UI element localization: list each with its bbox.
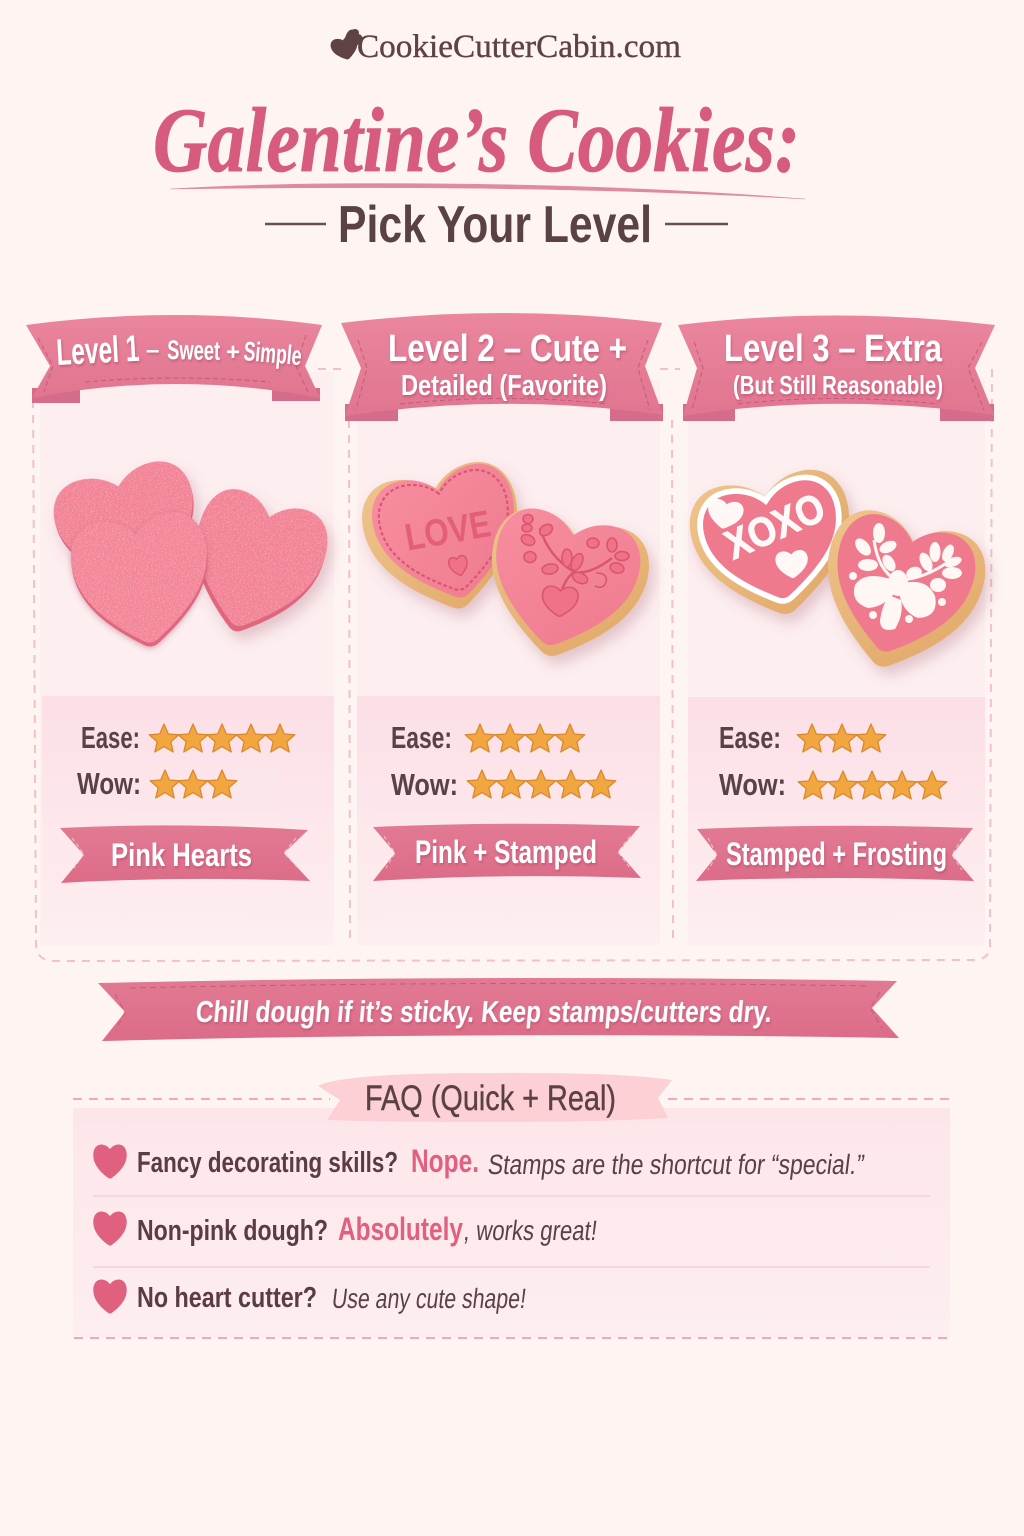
icon: heart xyxy=(93,1144,127,1179)
image: three pink heart cookies xyxy=(47,454,337,656)
FAQ heading pill: FAQ (Quick + Real) xyxy=(365,1079,616,1118)
FAQ heading pill xyxy=(318,1073,672,1122)
FAQ row 2 xyxy=(93,1211,599,1247)
cookie: XOXO frosting: XOXO xyxy=(718,484,832,568)
panel: FAQ xyxy=(73,1073,950,1338)
card background xyxy=(688,380,985,945)
panel: level 2 xyxy=(341,313,663,945)
rating band xyxy=(357,696,660,945)
FAQ row 3: No heart cutter? xyxy=(137,1282,317,1314)
title: Galentine’s Cookies: xyxy=(153,89,800,191)
banner: level 1 heading: Level 1 xyxy=(55,328,140,373)
FAQ row 1: Stamps are the shortcut for “special.” xyxy=(486,1149,866,1180)
banner: level 1 heading: – xyxy=(146,337,159,364)
FAQ row 2: Non-pink dough? xyxy=(137,1215,328,1247)
image: frosted XOXO and flower heart cookies xyxy=(683,463,995,687)
ease rating: Ease: xyxy=(719,720,781,755)
icon: heart xyxy=(93,1211,127,1246)
cookie: XOXO frosting xyxy=(683,463,866,629)
banner: level 2 heading: Level 2 – Cute + xyxy=(388,328,627,370)
wow rating xyxy=(77,766,237,801)
panel: level 1 xyxy=(26,315,337,945)
FAQ row 1: Fancy decorating skills? xyxy=(137,1147,398,1179)
cookie: LOVE stamp: LOVE xyxy=(402,503,494,560)
icon: logo hearts xyxy=(329,28,364,63)
tip banner xyxy=(98,978,899,1041)
patch behind wow rating xyxy=(235,768,278,811)
logo text: CookieCutterCabin.com xyxy=(357,29,681,65)
image: stamped LOVE and floral heart cookies xyxy=(354,455,657,673)
rating band xyxy=(42,696,334,945)
wow rating xyxy=(391,767,616,802)
banner: level 2 heading xyxy=(341,313,663,421)
wow rating: Wow: xyxy=(719,767,786,802)
logo: CookieCutterCabin.com xyxy=(329,28,681,65)
ribbon: Pink + Stamped: Pink + Stamped xyxy=(415,834,597,870)
banner: level 3 heading xyxy=(678,316,995,421)
cookie: floral stamp xyxy=(472,501,657,673)
subtitle: Pick Your Level xyxy=(338,196,652,254)
panel: level 3 xyxy=(678,316,995,945)
ribbon: Pink Hearts xyxy=(60,825,310,883)
banner: level 2 heading: Detailed (Favorite) xyxy=(401,370,607,402)
ribbon: Pink + Stamped xyxy=(373,824,641,881)
banner: level 3 heading: (But Still Reasonable) xyxy=(733,370,943,400)
banner: level 1 heading: + xyxy=(226,339,240,366)
outer dashed frame around levels xyxy=(33,362,992,961)
ease rating: Ease: xyxy=(391,720,452,755)
FAQ row 1 xyxy=(93,1143,866,1180)
banner: level 1 heading xyxy=(26,315,322,403)
wow rating: Wow: xyxy=(391,767,458,802)
banner: level 1 heading: Simple xyxy=(242,336,303,371)
banner: level 3 heading: Level 3 – Extra xyxy=(724,328,943,370)
FAQ row 2: Absolutely xyxy=(338,1211,463,1247)
banner: level 1 heading: Sweet xyxy=(167,335,220,366)
ease rating xyxy=(391,720,585,755)
icon: heart xyxy=(93,1279,127,1314)
card background xyxy=(40,372,334,945)
ease rating: Ease: xyxy=(81,720,140,755)
cookie: flower frosting xyxy=(804,502,995,687)
FAQ row 3 xyxy=(93,1279,528,1314)
ease rating xyxy=(81,720,295,755)
ribbon: Stamped + Frosting xyxy=(696,826,974,881)
title underline swoosh xyxy=(170,184,805,199)
ribbon: Pink Hearts: Pink Hearts xyxy=(111,837,252,873)
ribbon: Stamped + Frosting: Stamped + Frosting xyxy=(726,836,947,872)
tip banner: Chill dough if it’s sticky. Keep stamps/cutters dry. xyxy=(194,996,773,1029)
card background xyxy=(357,380,660,945)
FAQ row 2: , works great! xyxy=(462,1215,599,1246)
rating band xyxy=(688,697,985,945)
FAQ background xyxy=(73,1108,950,1338)
ease rating xyxy=(719,720,886,755)
cookie: LOVE stamp xyxy=(354,455,537,626)
wow rating xyxy=(719,767,947,802)
FAQ row 1: Nope. xyxy=(411,1143,479,1179)
wow rating: Wow: xyxy=(77,766,141,801)
FAQ row 3: Use any cute shape! xyxy=(330,1283,528,1314)
